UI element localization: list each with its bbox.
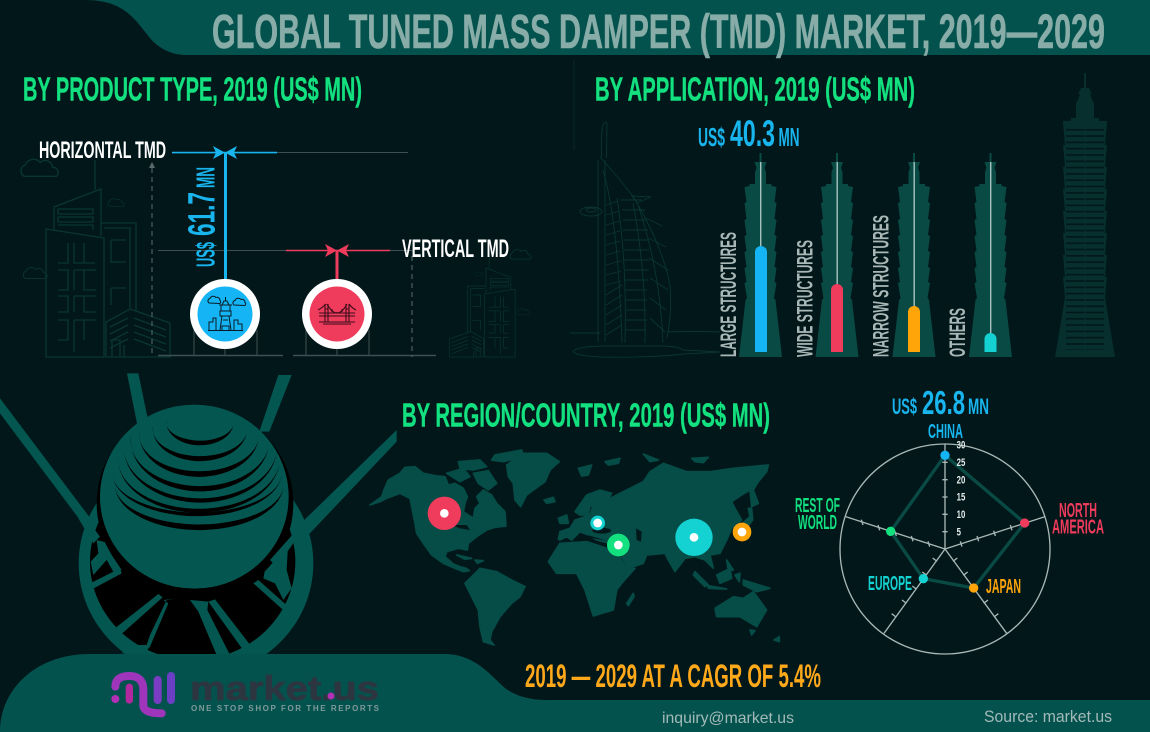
icon: bridge circle: [302, 279, 372, 349]
label: japan: JAPAN: [986, 576, 1021, 598]
label: china: CHINA: [928, 421, 963, 443]
marker: china: [675, 519, 713, 556]
logo dot: [328, 692, 334, 700]
decorative city right: [449, 250, 531, 357]
logo wordmark: market.us: [190, 670, 379, 708]
label: north america: NORTH: [1059, 500, 1097, 522]
bar: narrow structures: NARROW STRUCTURES: [868, 215, 894, 357]
value: US$ 40.3 MN: MN: [778, 122, 800, 152]
label: rest of world: [795, 495, 840, 534]
marker: japan: [733, 523, 751, 541]
ring inner void: [90, 463, 295, 660]
blue marker line: [172, 146, 277, 280]
logo tagline: ONE STOP SHOP FOR THE REPORTS: [191, 704, 380, 713]
scale labels: 15: [957, 492, 965, 504]
bar: wide structures: WIDE STRUCTURES: [792, 240, 818, 357]
sphere body: [100, 405, 289, 589]
bar: large structures: LARGE STRUCTURES: [716, 232, 741, 357]
label: north america: [1052, 500, 1104, 538]
arm overlays: [78, 510, 297, 567]
guide lines: [158, 152, 436, 356]
value: US$ 26.8 MN: MN: [968, 394, 989, 419]
scale labels: [957, 439, 965, 538]
inland water cuts: [452, 525, 642, 542]
CAGR callout: 2019 — 2029 AT A CAGR OF 5.4%: [525, 658, 821, 694]
data points: [886, 451, 1029, 593]
divider hairline: [573, 60, 575, 150]
radar chart: [840, 439, 1050, 654]
value: US$ 61.7 MN: 61.7: [182, 192, 224, 236]
value: US$ 61.7 MN: [182, 167, 224, 267]
footer band: [0, 654, 1150, 732]
sphere contour grooves: [113, 420, 283, 530]
bar: large structures: [716, 153, 782, 357]
contact email: inquiry@market.us: [662, 710, 794, 727]
outer ring: [79, 450, 313, 677]
logo icon: [115, 676, 171, 713]
heading: by product type: BY PRODUCT TYPE, 2019 (US$ MN): [23, 70, 362, 108]
struts and legs inside ring: [90, 540, 293, 655]
marker: europe: [590, 516, 605, 530]
sphere shadow: [97, 407, 293, 600]
panel: application chart: [570, 60, 1115, 357]
illustration: tuned mass damper sphere: [0, 373, 397, 677]
icon: tower circle: [190, 279, 260, 349]
value: US$ 40.3 MN: 40.3: [730, 113, 775, 154]
value: US$ 26.8 MN: [892, 384, 989, 421]
value: US$ 40.3 MN: US$: [698, 122, 725, 152]
world map: [370, 450, 779, 645]
marker: north america: [428, 497, 461, 530]
map landmasses: [370, 450, 779, 645]
scale labels: 30: [957, 439, 965, 451]
bar: others: OTHERS: [945, 308, 970, 357]
heading: by application: BY APPLICATION, 2019 (US$ MN): [595, 70, 915, 108]
bar: wide structures: [792, 153, 858, 357]
value: US$ 26.8 MN: US$: [892, 394, 917, 419]
dashed height guides: [149, 162, 412, 357]
red marker line: [286, 244, 390, 280]
vertical TMD label: VERTICAL TMD: [402, 235, 509, 263]
value: US$ 40.3 MN: [698, 113, 800, 154]
logo: market.us: [115, 670, 380, 713]
sphere support arms: [0, 373, 397, 567]
radar spokes and ticks: [846, 444, 1045, 633]
panel: product type chart: [21, 137, 531, 357]
scale labels: 5: [957, 526, 961, 538]
label: north america: AMERICA: [1052, 516, 1104, 538]
label: rest of world: WORLD: [798, 512, 837, 534]
bar: narrow structures: [868, 153, 936, 357]
label: europe: EUROPE: [868, 573, 912, 595]
label: rest of world: REST OF: [795, 495, 840, 517]
marker: rest of world: [607, 534, 630, 556]
header banner: [85, 0, 1150, 55]
heading: by region: BY REGION/COUNTRY, 2019 (US$ MN): [402, 396, 770, 434]
value: US$ 61.7 MN: MN: [190, 167, 220, 188]
bar: others: [945, 153, 1012, 357]
scale labels: 20: [957, 474, 965, 486]
decorative city left: [21, 159, 170, 357]
horizontal TMD label: HORIZONTAL TMD: [39, 137, 166, 164]
radar polygon: [891, 455, 1025, 588]
value: US$ 61.7 MN: US$: [190, 242, 220, 267]
source: Source: market.us: [984, 708, 1112, 726]
value: US$ 26.8 MN: 26.8: [922, 384, 965, 421]
scale labels: 10: [957, 509, 965, 521]
decorative: skyscraper silhouette: [1055, 73, 1115, 357]
scale labels: 25: [957, 457, 965, 469]
radar ring: [840, 444, 1050, 654]
decorative: sail-shaped hotel: [570, 122, 720, 357]
